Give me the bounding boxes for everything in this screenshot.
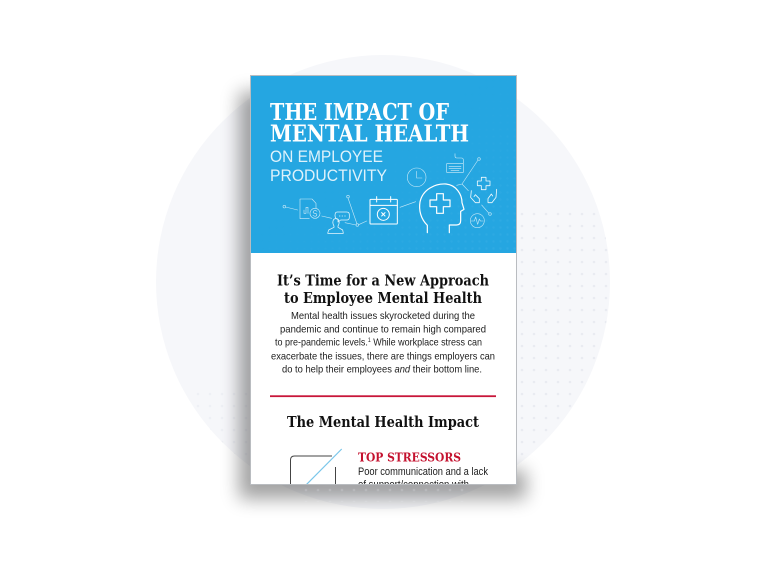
subtitle: PRODUCTIVITY xyxy=(270,166,387,185)
header icon network xyxy=(283,154,497,233)
icon: caring hands and cross xyxy=(471,177,497,203)
icon: keyboard xyxy=(447,154,463,173)
intro paragraph: exacerbate the issues, there are things employers can xyxy=(271,352,495,362)
blue header panel xyxy=(251,76,516,253)
icon: head with medical cross xyxy=(420,184,464,233)
dot pattern right xyxy=(521,213,607,455)
intro heading: to Employee Mental Health xyxy=(284,290,482,307)
main title: MENTAL HEALTH xyxy=(270,120,469,148)
dots below card xyxy=(296,486,472,502)
icon: calendar xyxy=(370,197,397,224)
intro paragraph: 1 xyxy=(368,338,371,344)
infographic card xyxy=(250,76,516,491)
intro paragraph xyxy=(271,311,495,376)
card shadow xyxy=(239,92,526,499)
icon: document and dollar xyxy=(300,199,320,219)
background circle xyxy=(156,55,610,509)
main title xyxy=(270,99,469,148)
subtitle: ON EMPLOYEE xyxy=(270,147,383,166)
intro paragraph: do to help their employees and their bottom line. xyxy=(282,364,482,376)
intro paragraph: Mental health issues skyrocketed during the xyxy=(291,311,475,322)
stressors text: of support/connection with xyxy=(358,479,469,491)
intro paragraph: While workplace stress can xyxy=(371,338,482,349)
subtitle xyxy=(270,147,387,185)
red divider xyxy=(270,395,496,397)
icon: stressors frame xyxy=(290,448,342,484)
dot pattern left xyxy=(196,385,250,465)
icon: person with speech bubble xyxy=(328,212,349,233)
top stressors block xyxy=(290,448,488,484)
intro paragraph: pandemic and continue to remain high compared xyxy=(280,324,486,336)
intro heading: It’s Time for a New Approach xyxy=(277,273,489,290)
intro paragraph: to pre-pandemic levels. xyxy=(275,338,382,349)
main title: THE IMPACT OF xyxy=(270,99,450,126)
intro heading xyxy=(277,273,489,307)
icon: clock xyxy=(407,168,426,187)
stressors text: Poor communication and a lack xyxy=(358,466,489,478)
section heading: The Mental Health Impact xyxy=(287,414,479,431)
stressors text xyxy=(358,467,488,484)
stressors heading: TOP STRESSORS xyxy=(358,451,461,465)
icon: pulse circle xyxy=(470,214,484,228)
network connectors xyxy=(283,158,491,226)
